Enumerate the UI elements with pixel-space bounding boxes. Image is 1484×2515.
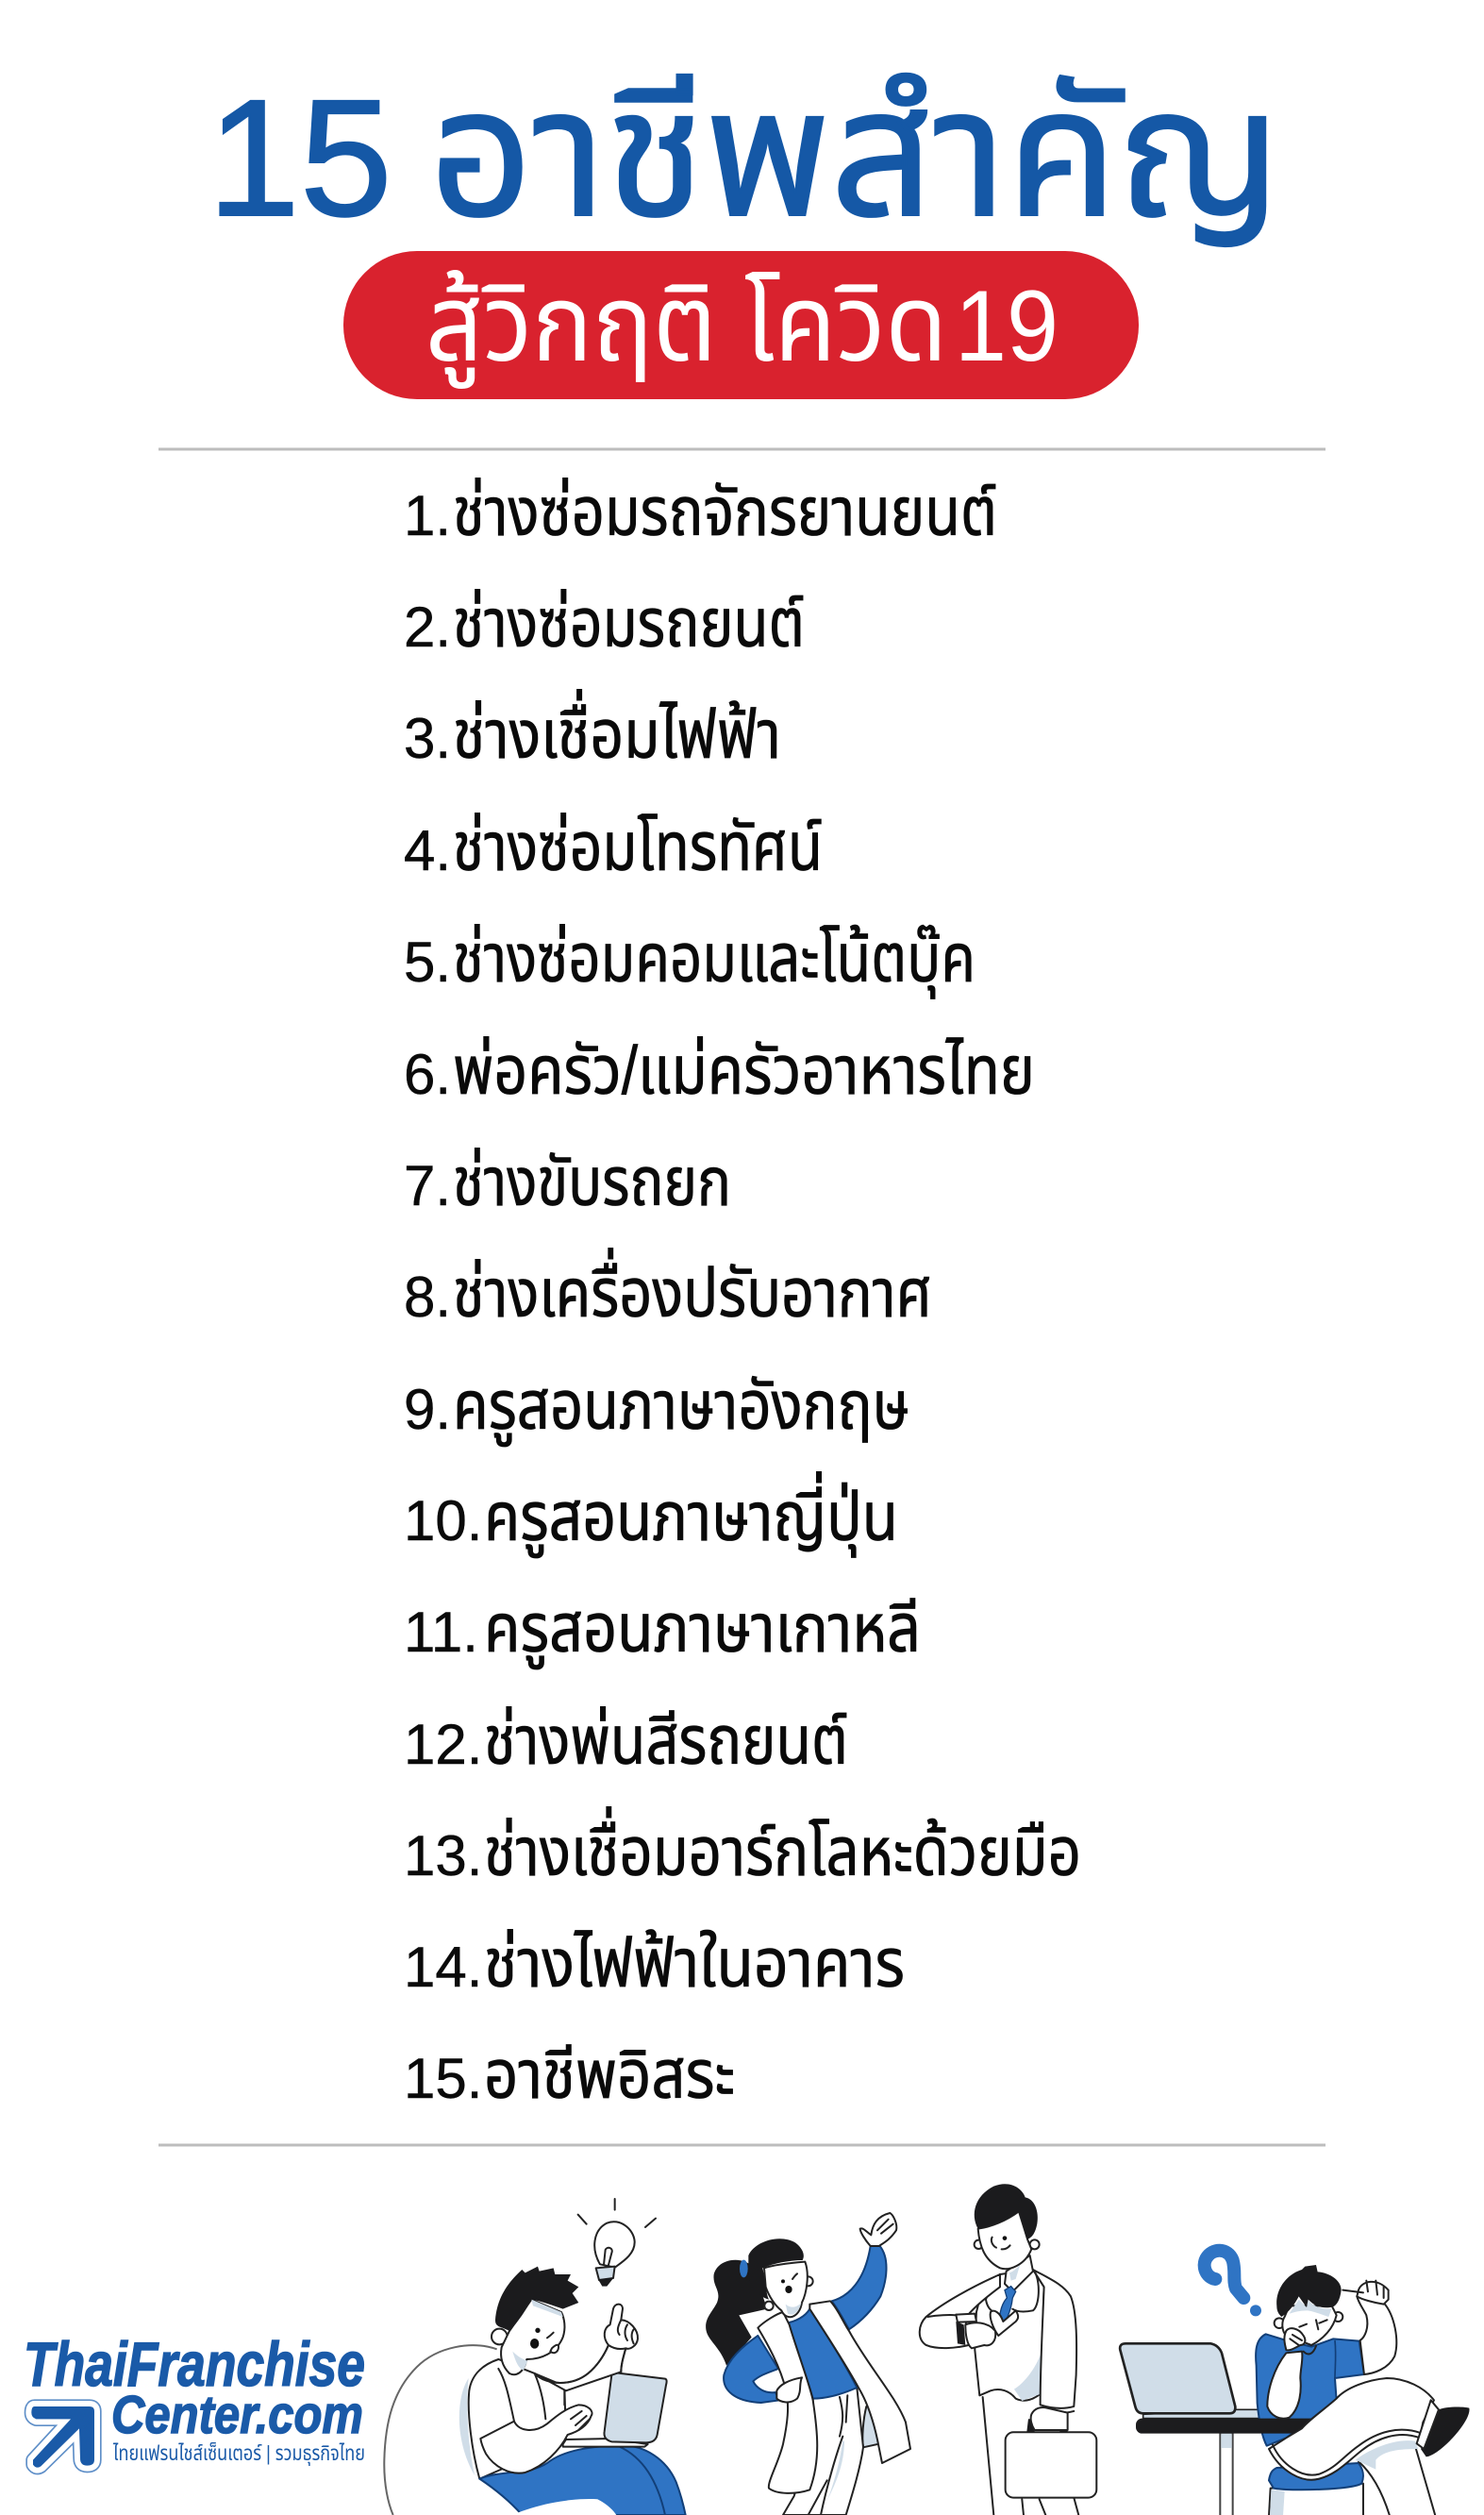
- lab coat: [758, 2312, 817, 2493]
- occupation list: ช่างซ่อมรถยนต์: [453, 586, 805, 662]
- head: [492, 2329, 508, 2344]
- occupation list: ช่างซ่อมโทรทัศน์: [453, 810, 823, 885]
- occupation list: ช่างซ่อมรถจักรยานยนต์: [453, 475, 997, 550]
- occupation list: 1.: [404, 484, 451, 547]
- occupation list: 5.: [404, 931, 451, 994]
- occupation list: 6.: [404, 1043, 451, 1106]
- subtitle pill: [343, 251, 1139, 399]
- torso: [469, 2359, 566, 2479]
- occupation list: ช่างเชื่อมอาร์กโลหะด้วยมือ: [484, 1806, 1081, 1890]
- laptop: [1120, 2343, 1261, 2419]
- occupation list: 14.: [404, 1936, 482, 1999]
- occupation list: 12.: [404, 1713, 482, 1776]
- raised arm: [1342, 2281, 1396, 2374]
- occupation list: 3.: [404, 707, 451, 770]
- occupation list: 7.: [404, 1154, 451, 1217]
- occupation list: 11.: [404, 1601, 478, 1664]
- occupation list: ช่างเชื่อมไฟฟ้า: [453, 689, 781, 773]
- occupation list: 8.: [404, 1266, 451, 1329]
- occupation list: อาชีพอิสระ: [484, 2037, 735, 2113]
- occupation list: ครูสอนภาษาญี่ปุ่น: [484, 1471, 898, 1558]
- occupation list: 10.: [404, 1489, 482, 1552]
- title: 15: [208, 66, 392, 251]
- shirt and collar: [1005, 2255, 1033, 2291]
- occupation list: ช่างซ่อมคอมและโน้ตบุ๊ค: [453, 921, 975, 999]
- person 4: thinking man at table with laptop: [1120, 2251, 1470, 2515]
- crossed leg: [1269, 2378, 1470, 2480]
- head: [975, 2240, 983, 2249]
- occupation list: 9.: [404, 1378, 451, 1441]
- occupation list: ช่างพ่นสีรถยนต์: [484, 1703, 848, 1779]
- subtitle pill: 19: [955, 269, 1059, 382]
- occupation list: 4.: [404, 819, 451, 882]
- raised arm and hand: [535, 2345, 625, 2390]
- blue trousers: [479, 2446, 686, 2515]
- table top: [1136, 2419, 1318, 2434]
- logo: ThaiFranchise Center.com: ThaiFranchise: [24, 2329, 365, 2399]
- laptop: [563, 2439, 648, 2447]
- person 1: man on bean bag with laptop: [384, 2267, 686, 2515]
- other leg: [1356, 2440, 1436, 2515]
- person 2: woman in lab coat: [706, 2184, 1096, 2515]
- logo: ThaiFranchise Center.com: ไทยแฟรนไชส์เซ็นเตอร์ | รวมธุรกิจไทย: [112, 2441, 365, 2466]
- subtitle pill: สู้วิกฤติ โควิด: [425, 264, 947, 389]
- raised blue arm: [832, 2246, 887, 2329]
- body: [1256, 2334, 1364, 2446]
- occupation list: พ่อครัว/แม่ครัวอาหารไทย: [453, 1033, 1035, 1109]
- occupation list: ช่างเครื่องปรับอากาศ: [453, 1248, 932, 1332]
- head: [1275, 2265, 1342, 2354]
- title: อาชีพสำคัญ: [429, 54, 1281, 254]
- occupation list: 13.: [404, 1824, 482, 1887]
- logo: ThaiFranchise Center.com: Center.com: [111, 2385, 363, 2445]
- occupation list: ครูสอนภาษาเกาหลี: [484, 1591, 921, 1669]
- occupation list: ครูสอนภาษาอังกฤษ: [453, 1368, 909, 1447]
- blue shirt: [786, 2309, 857, 2399]
- occupation list: 15.: [404, 2047, 482, 2110]
- icon: question mark: [1205, 2251, 1261, 2316]
- occupation list: ช่างไฟฟ้าในอาคาร: [484, 1926, 905, 2002]
- icon: light bulb: [578, 2199, 656, 2287]
- person 3: man in suit checking watch: [920, 2184, 1096, 2515]
- trousers: [783, 2388, 863, 2515]
- occupation list: 2.: [404, 595, 451, 659]
- icon: logo arrow: [31, 2406, 94, 2468]
- occupation list: [404, 475, 1081, 2113]
- left arm with watch: [920, 2274, 1000, 2348]
- head: [764, 2302, 774, 2310]
- leaning arm: [1267, 2352, 1302, 2419]
- table leg: [1220, 2434, 1233, 2515]
- logo: ThaiFranchise Center.com: [24, 2329, 365, 2468]
- typing arm: [480, 2405, 592, 2473]
- occupation list: ช่างขับรถยก: [453, 1145, 731, 1220]
- stool: [1269, 2463, 1363, 2515]
